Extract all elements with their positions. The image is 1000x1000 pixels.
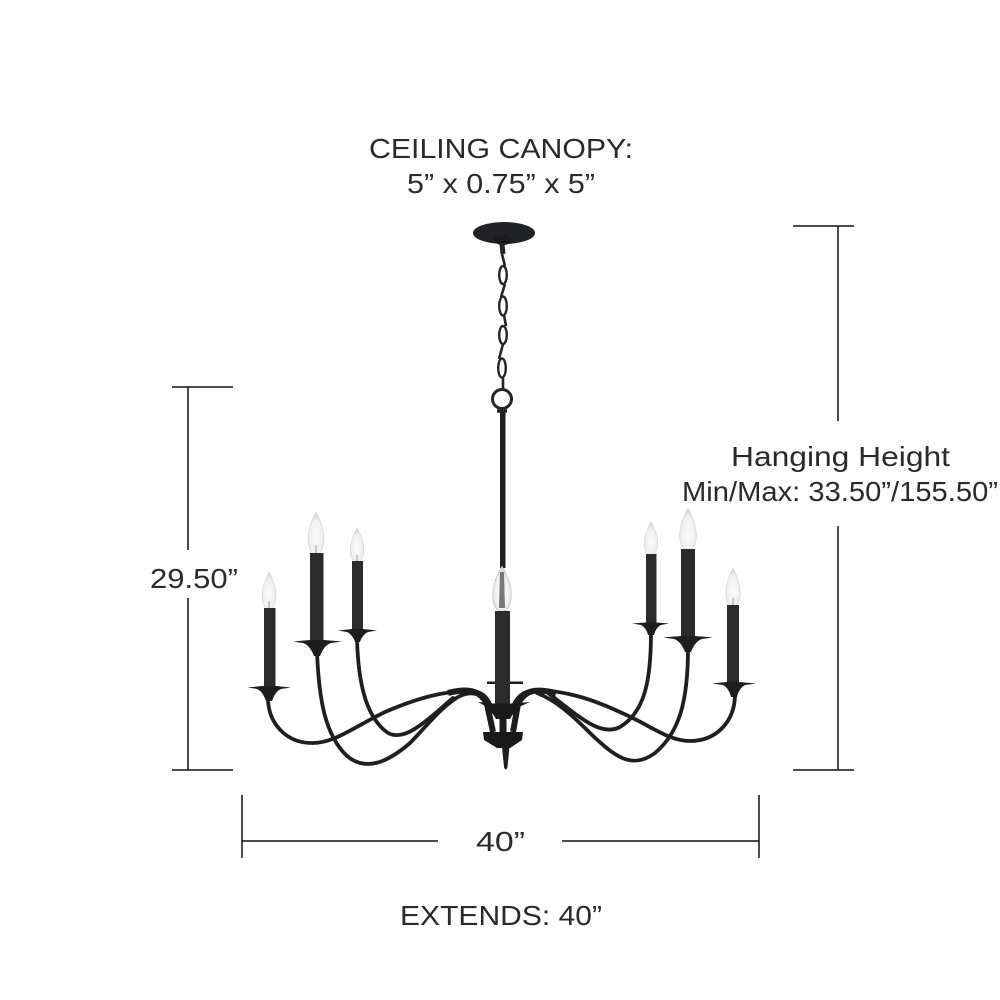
- centre bulb: [493, 566, 511, 611]
- dimension: fixture height bracket: [172, 387, 233, 770]
- centre rod: [500, 412, 506, 568]
- heading: ceiling canopy dimensions: 5” x 0.75” x 5”: [407, 168, 595, 199]
- label: fixture height: 29.50”: [150, 563, 238, 594]
- base block: [483, 732, 523, 748]
- chain: [498, 244, 507, 391]
- label: hanging height: Hanging Height: [731, 441, 950, 472]
- rear cup plate: [487, 682, 523, 684]
- label: hanging height: [682, 441, 998, 507]
- label: hanging height: Min/Max: 33.50”/155.50”: [682, 476, 998, 507]
- chandelier: [248, 222, 756, 769]
- label: extends: EXTENDS: 40”: [400, 900, 602, 931]
- finial spike: [502, 747, 510, 769]
- candle: far left: [248, 572, 291, 701]
- candle: far right: [712, 568, 756, 697]
- ring connector: [492, 390, 512, 411]
- centre post: [500, 717, 506, 735]
- heading: ceiling canopy dimensions: CEILING CANOPY:: [369, 133, 633, 164]
- ceiling canopy plate: [473, 222, 535, 245]
- candle: left tall: [293, 512, 342, 656]
- centre candle body: [495, 611, 510, 706]
- candle: right tall: [663, 508, 713, 652]
- dimension: hanging height bracket: [793, 226, 854, 770]
- heading: ceiling canopy dimensions: [369, 133, 633, 199]
- dimension: width bracket: [242, 795, 759, 858]
- curved arms: [268, 632, 735, 764]
- cup: [478, 702, 530, 719]
- centre hub and candle: [448, 566, 556, 769]
- label: width: 40”: [476, 826, 525, 857]
- candle: right inner: [632, 522, 669, 635]
- thick arm roots: [448, 691, 556, 732]
- candle: left inner: [338, 528, 377, 642]
- filament and rod shadow: [499, 572, 505, 608]
